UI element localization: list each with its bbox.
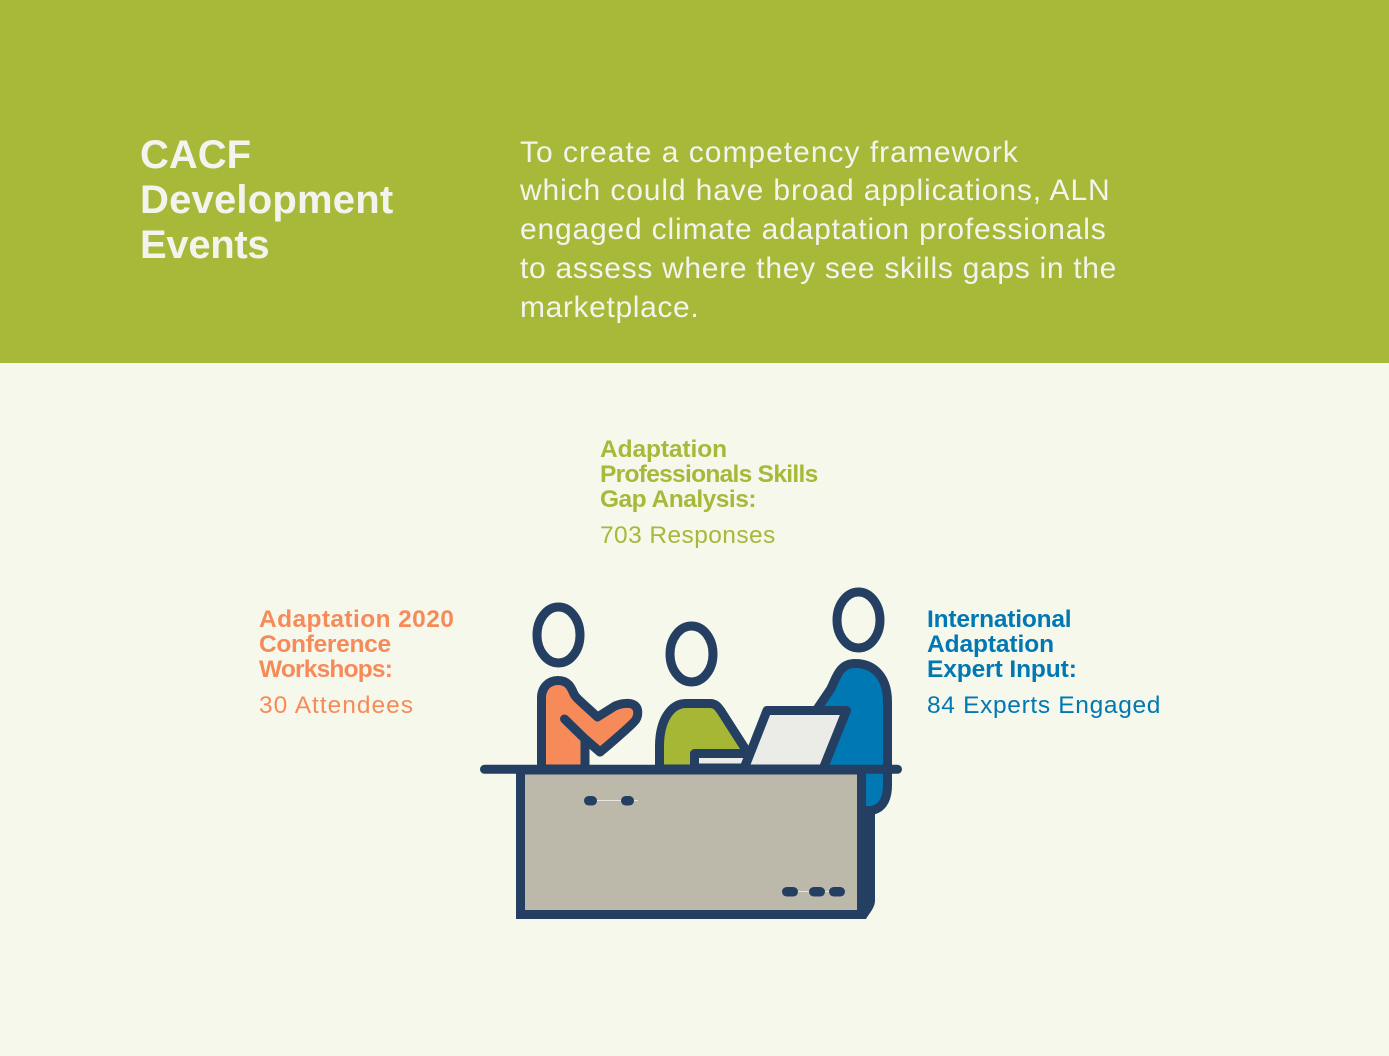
intro text: to assess where they see skills gaps in the (520, 252, 1117, 285)
intro text: engaged climate adaptation professionals (520, 213, 1107, 246)
callout: expert input (927, 606, 1161, 719)
intro text: marketplace. (520, 291, 699, 324)
desk detail: lower handle (782, 887, 845, 896)
person: left, orange (537, 607, 638, 769)
desk (484, 769, 898, 919)
title: Development (140, 178, 393, 222)
laptop screen (744, 710, 846, 769)
callout: skills gap analysis: 703 Responses (600, 522, 776, 549)
callout: expert input: 84 Experts Engaged (927, 692, 1161, 719)
callout: conference workshops: Workshops: (259, 656, 392, 683)
title: Events (140, 223, 269, 267)
desk detail: upper handle (584, 796, 638, 806)
callout: conference workshops: 30 Attendees (259, 692, 414, 719)
callout: expert input: Adaptation (927, 631, 1054, 658)
callout: conference workshops (259, 606, 454, 719)
callout: skills gap analysis: Professionals Skills (600, 461, 818, 488)
header band (0, 0, 1389, 363)
intro text: which could have broad applications, ALN (520, 174, 1111, 207)
callout: conference workshops: Adaptation 2020 (259, 606, 454, 633)
callout: expert input: International (927, 606, 1071, 633)
intro text (520, 136, 1117, 324)
callout: skills gap analysis: Gap Analysis: (600, 486, 756, 513)
title (140, 133, 393, 267)
callout: conference workshops: Conference (259, 631, 391, 658)
person: right, blue (813, 592, 888, 811)
person: middle, green (660, 626, 746, 769)
small paper on desk (694, 754, 750, 768)
intro text: To create a competency framework (520, 136, 1019, 168)
callout: skills gap analysis (600, 436, 818, 549)
title: CACF (140, 133, 251, 177)
callout: expert input: Expert Input: (927, 656, 1077, 683)
callout: skills gap analysis: Adaptation (600, 436, 727, 463)
